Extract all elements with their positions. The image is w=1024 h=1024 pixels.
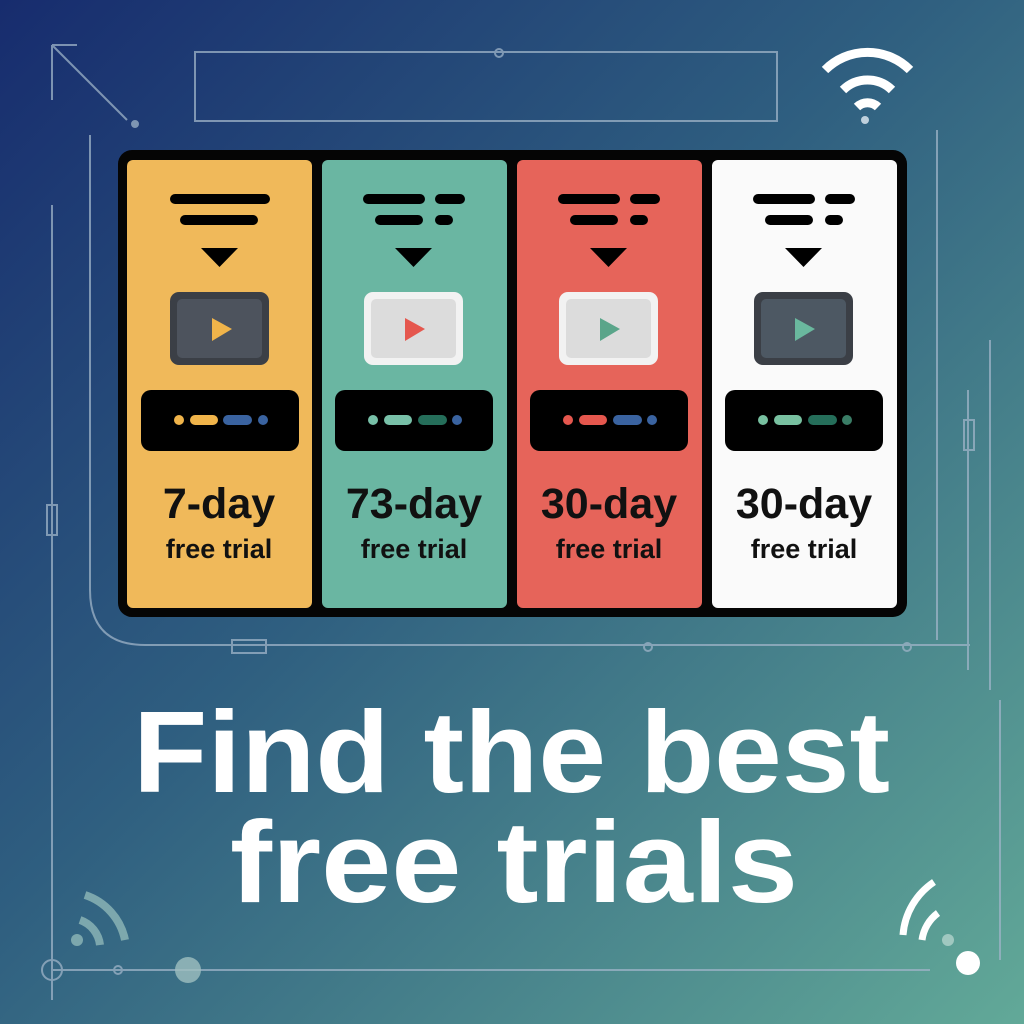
icon: wifi bottom left	[71, 895, 125, 946]
card: 7-day: free trial	[166, 534, 272, 564]
card: 30-day red: free trial	[556, 534, 662, 564]
card: 7-day	[127, 160, 312, 608]
title	[133, 687, 890, 927]
card: 30-day white: 30-day	[736, 480, 872, 528]
title: Find the best	[133, 687, 890, 817]
card: 73-day: 73-day	[346, 480, 482, 528]
card: 73-day: free trial	[361, 534, 467, 564]
icon: wifi bottom right	[903, 882, 980, 975]
card: 30-day red	[517, 160, 702, 608]
title: free trials	[230, 797, 798, 927]
card: 30-day red: 30-day	[541, 480, 677, 528]
card: 30-day white	[712, 160, 897, 608]
card: 7-day: 7-day	[163, 480, 275, 528]
icon: wifi top right	[825, 52, 910, 124]
panel: trial cards container	[118, 150, 907, 617]
card: 30-day white: free trial	[751, 534, 857, 564]
card: 73-day	[322, 160, 507, 608]
